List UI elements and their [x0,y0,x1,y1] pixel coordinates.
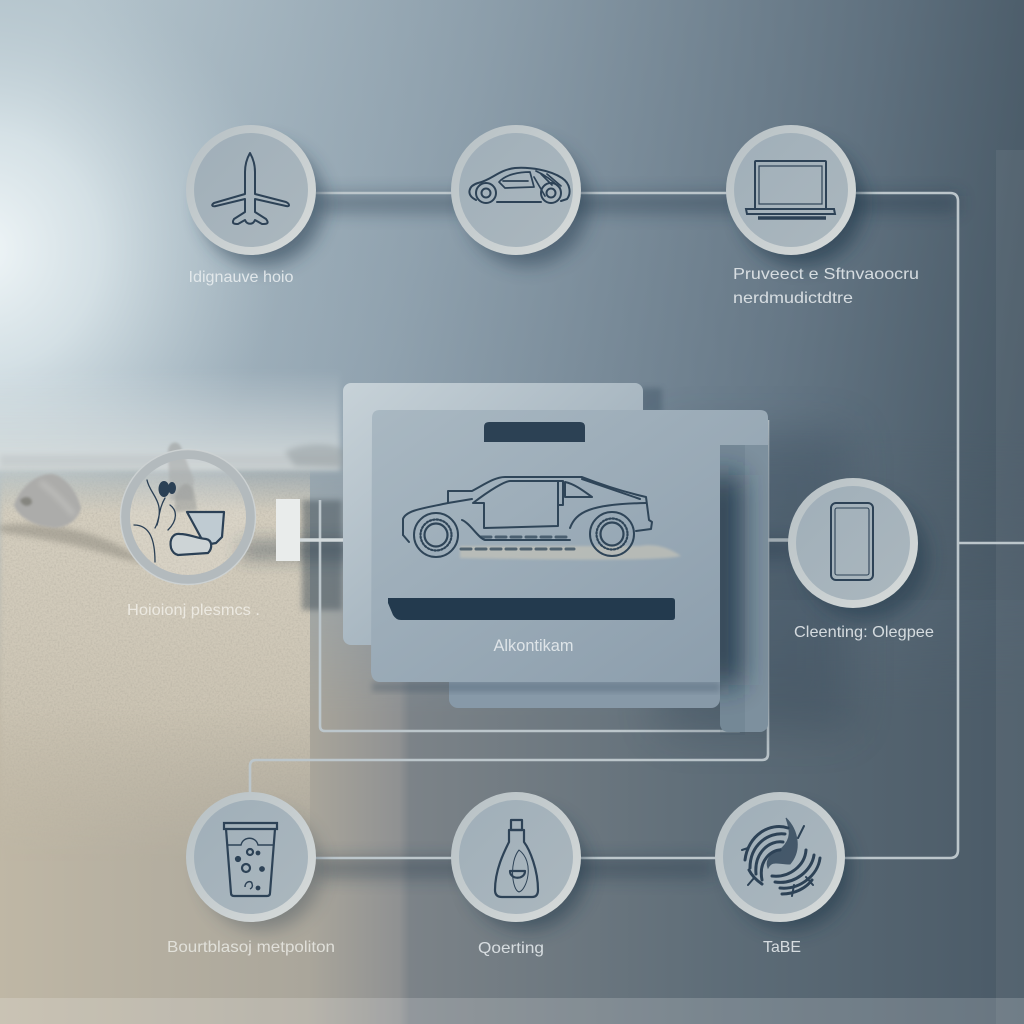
text: card label: Alkontikam [494,637,574,655]
node: laptop [726,125,919,307]
text: phone label: Cleenting: Olegpee [794,624,934,641]
icon: swirl [742,818,820,896]
rear panel [720,445,768,732]
text: swirl label: TaBE [763,939,801,956]
connectors [240,193,1024,868]
icon: sports car [469,168,570,203]
text: beach label: Hoioionj plesmcs . [127,602,260,619]
icon: car illustration [403,477,652,557]
connector tab [276,499,300,561]
icon: bottle [495,820,538,897]
node: sports car [451,125,589,266]
icon: cup [224,823,277,896]
node: beach lens [120,450,256,584]
beach photo panel [0,383,343,815]
text: bottle label: Qoerting [478,940,544,957]
rock [14,474,81,528]
node: cup [167,792,335,956]
icon: airplane [212,153,289,224]
text: laptop label [733,266,919,307]
front card [371,410,768,682]
car speed trail [460,545,681,560]
back card [343,383,643,645]
central card stack [343,383,850,735]
dark smudge behind connector [302,500,342,610]
card shadows [660,430,850,730]
text: laptop label: nerdmudictdtre [733,290,853,307]
text: laptop label: Pruveect e Sftnvaoocru [733,266,919,283]
node: bottle [451,792,587,957]
icon: laptop [746,161,835,218]
card top bar [484,422,585,442]
card lower bar [388,598,675,620]
text: cup label: Bourtblasoj metpoliton [167,939,335,956]
node: airplane [186,125,324,286]
distant figure [168,442,194,500]
text: airplane label: Idignauve hoio [188,269,294,286]
icon: plant and bowl [134,480,224,562]
node: swirl [715,792,851,956]
lower card [449,600,720,708]
icon: phone [831,503,873,580]
node: phone [788,478,934,641]
